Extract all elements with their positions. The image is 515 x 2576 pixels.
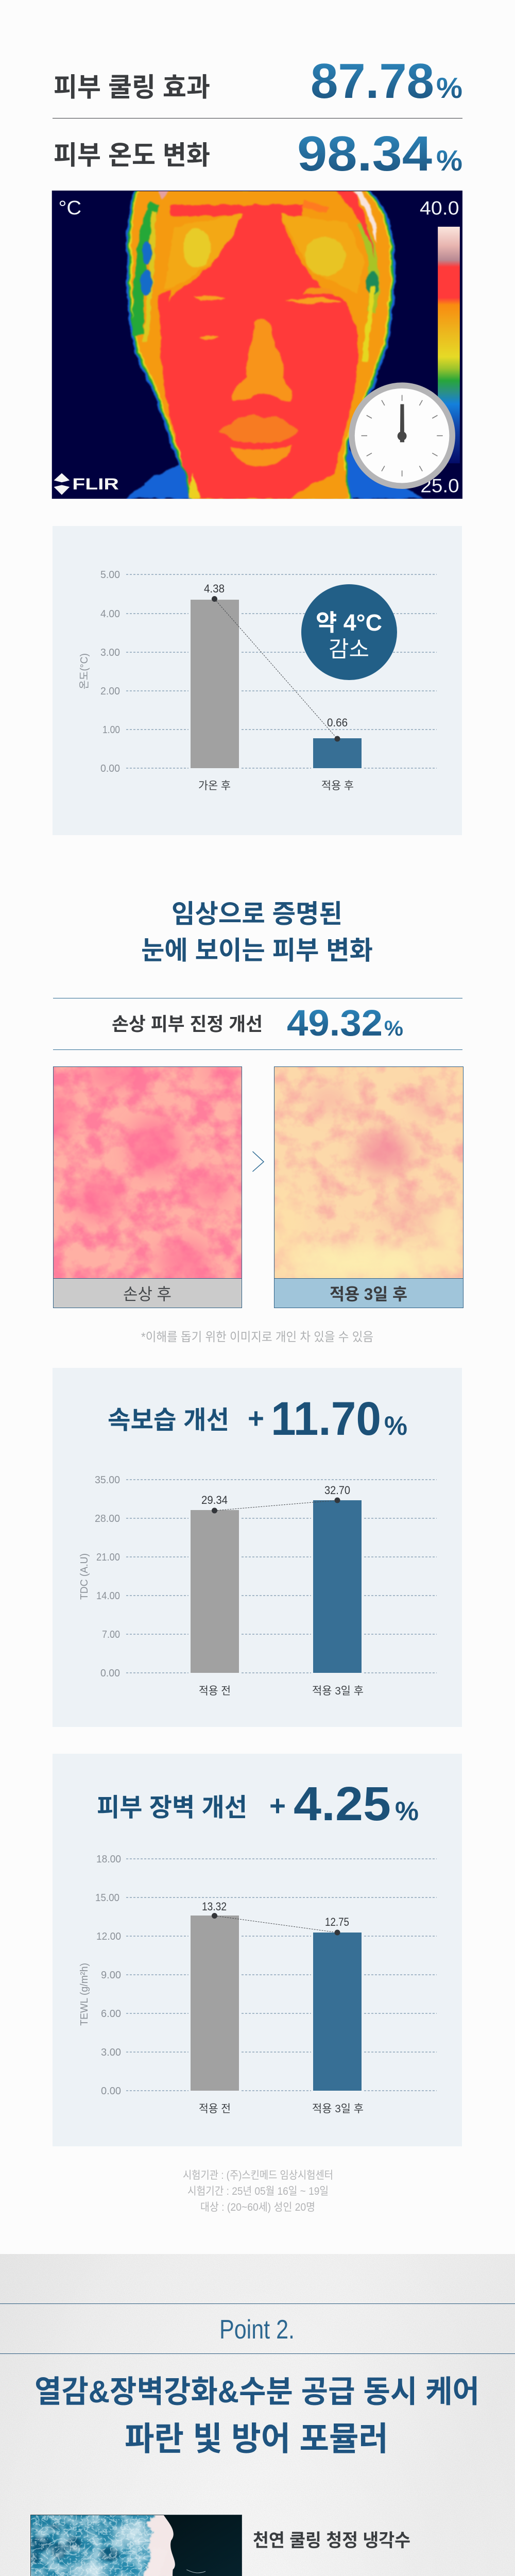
unit and scale labels: 40.0 (420, 197, 459, 218)
test information text (183, 2170, 333, 2213)
callout: about 4 degrees decrease: 감소 (329, 637, 369, 662)
stat: skin temperature change: 피부 온도 변화 (54, 141, 210, 170)
grid lines and axis: 2.00 (100, 686, 120, 697)
unit and scale labels: 25.0 (420, 475, 459, 496)
after photo: skin after 3 days (273, 1066, 464, 1280)
icon: clock (349, 382, 455, 489)
heading: clinically proven visible skin change: 눈에 보이는 피부 변화 (141, 936, 373, 965)
grid lines and axis: 7.00 (102, 1629, 120, 1640)
heading: deep moisture improvement: % (384, 1411, 407, 1441)
grid lines and axis: 1.00 (102, 724, 120, 736)
footnote: image disclaimer: *이해를 돕기 위한 이미지로 개인 차 있을 수 있음 (141, 1330, 373, 1344)
grid lines and axis: 28.00 (95, 1513, 120, 1524)
x axis labels: 적용 3일 후 (312, 2103, 364, 2115)
thermal scale bar (438, 227, 460, 463)
heading: deep moisture improvement: 속보습 개선 (108, 1406, 229, 1434)
grid lines and axis (79, 1475, 437, 1679)
x axis labels (199, 1685, 364, 1697)
grid lines and axis (79, 1854, 437, 2097)
FLIR logo (54, 473, 119, 495)
grid lines and axis: 15.00 (95, 1892, 119, 1904)
stat: damaged skin soothing improvement (53, 998, 462, 1050)
before label (54, 1279, 242, 1308)
stat: skin temperature change: 98.34 (297, 126, 432, 181)
before label: 손상 후 (123, 1285, 171, 1303)
data points and connector: 29.34 (201, 1494, 228, 1506)
stat: skin cooling effect (54, 54, 462, 109)
x axis labels: 적용 전 (199, 1685, 231, 1697)
grid lines and axis: 18.00 (96, 1854, 121, 1865)
panel: deep moisture chart (53, 1368, 462, 1727)
callout: about 4 degrees decrease: 약 4°C (316, 609, 382, 636)
heading: point 2 title: 열감&장벽강화&수분 공급 동시 케어 (35, 2375, 479, 2409)
x axis labels: 가온 후 (198, 780, 231, 792)
grid lines and axis: 0.00 (100, 763, 120, 774)
heading: deep moisture improvement: 11.70 (271, 1393, 381, 1445)
grid lines and axis: TEWL (g/m²h) (79, 1963, 90, 2026)
grid lines and axis: 35.00 (95, 1475, 120, 1486)
data points and connector: 12.75 (325, 1916, 349, 1928)
grid lines and axis: 4.00 (100, 608, 120, 620)
callout: about 4 degrees decrease (301, 584, 397, 680)
panel: skin barrier chart (53, 1754, 462, 2146)
heading: skin barrier improvement: 피부 장벽 개선 (97, 1794, 247, 1822)
heading: clinically proven visible skin change (141, 900, 373, 965)
FLIR logo: FLIR (72, 474, 119, 493)
section label: point 2: Point 2. (219, 2315, 295, 2345)
heading: skin barrier improvement (97, 1777, 419, 1831)
heading: skin barrier improvement: 4.25 (294, 1777, 391, 1831)
grid lines and axis: 6.00 (101, 2008, 121, 2020)
stat: skin temperature change (54, 126, 462, 181)
text block: natural cooling seawater: 천연 쿨링 청정 냉각수 (253, 2531, 410, 2551)
grid lines and axis: 3.00 (101, 2047, 121, 2058)
heading: point 2 title (35, 2375, 479, 2458)
after label (274, 1279, 464, 1308)
grid lines and axis: 0.00 (100, 1668, 120, 1679)
grid lines and axis: 5.00 (100, 569, 120, 581)
grid lines and axis: 온도(°C) (79, 653, 90, 689)
data points and connector: 32.70 (324, 1484, 350, 1497)
stat: skin cooling effect: % (436, 72, 462, 105)
unit and scale labels: °C (59, 197, 81, 219)
x axis labels: 적용 전 (199, 2103, 231, 2115)
grid lines and axis: TDC (A.U) (79, 1553, 90, 1600)
stat: skin temperature change: % (436, 144, 462, 177)
x axis labels: 적용 3일 후 (312, 1685, 364, 1697)
grid lines and axis: 12.00 (96, 1931, 121, 1942)
grid lines and axis (79, 569, 437, 774)
before photo: skin after damage (43, 1063, 244, 1279)
grid lines and axis: 21.00 (96, 1552, 120, 1563)
x axis labels: 적용 후 (321, 780, 354, 792)
test information text: 시험기관 : (주)스킨메드 임상시험센터 (183, 2170, 333, 2181)
arrow: chevron (252, 1151, 264, 1172)
data points and connector: 13.32 (202, 1900, 227, 1913)
stat: damaged skin soothing improvement: % (384, 1016, 403, 1040)
bars (188, 1500, 364, 1674)
bars (188, 600, 364, 769)
data points and connector (201, 1484, 350, 1514)
grid lines and axis: 0.00 (101, 2086, 121, 2097)
stat: skin cooling effect: 피부 쿨링 효과 (54, 73, 210, 102)
grid lines and axis: 14.00 (96, 1590, 120, 1602)
bars (188, 1916, 364, 2092)
x axis labels (198, 780, 354, 792)
stat: skin cooling effect: 87.78 (311, 54, 434, 109)
heading: deep moisture improvement (108, 1393, 407, 1445)
heading: clinically proven visible skin change: 임상으로 증명된 (171, 900, 342, 928)
test information text: 시험기간 : 25년 05월 16일 ~ 19일 (187, 2185, 329, 2197)
heading: point 2 title: 파란 빛 방어 포뮬러 (125, 2420, 388, 2458)
x axis labels (199, 2103, 364, 2115)
data points and connector: 0.66 (327, 716, 348, 729)
test information text: 대상 : (20~60세) 성인 20명 (200, 2201, 315, 2213)
grid lines and axis: 9.00 (101, 1970, 121, 1981)
stat: damaged skin soothing improvement: 49.32 (287, 1003, 383, 1044)
panel: point 2 silver background (0, 2254, 515, 2576)
after label: 적용 3일 후 (330, 1285, 407, 1303)
data points and connector: 4.38 (204, 582, 225, 595)
thermal camera image (52, 190, 462, 499)
heading: deep moisture improvement: + (248, 1402, 264, 1434)
stat: damaged skin soothing improvement: 손상 피부 진정 개선 (112, 1013, 263, 1035)
heading: skin barrier improvement: % (395, 1797, 419, 1826)
photo: ocean waves (29, 2515, 242, 2576)
data points and connector (204, 582, 348, 742)
heading: skin barrier improvement: + (269, 1789, 286, 1822)
panel: temperature chart (53, 526, 462, 835)
unit and scale labels (59, 197, 459, 496)
grid lines and axis: 3.00 (100, 647, 120, 658)
data points and connector (202, 1900, 349, 1935)
